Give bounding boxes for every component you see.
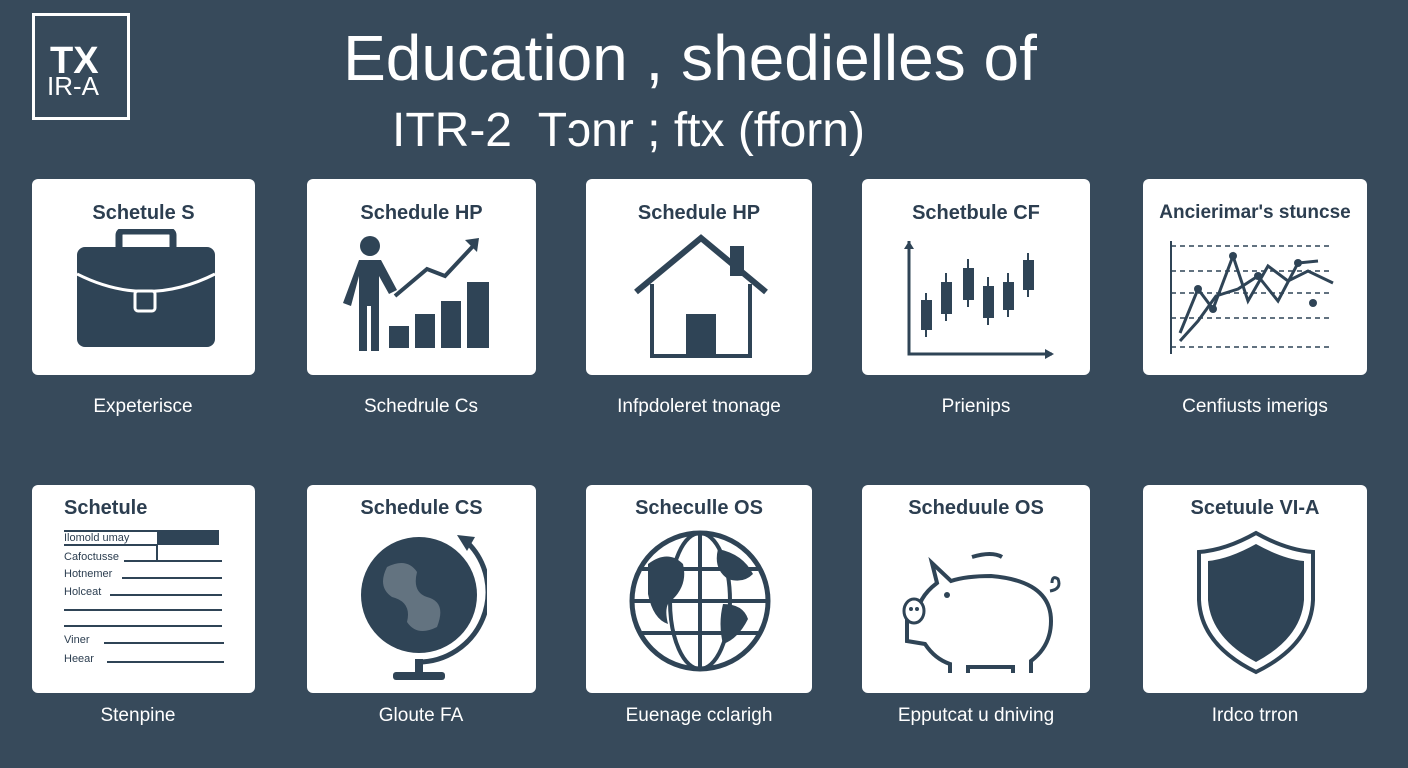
- panel: Ancierimar's stunsce: Ancierimar's stuncse: [1159, 202, 1351, 223]
- panel: Scetulle VI-A: [1143, 485, 1367, 693]
- icon: form: Ilomold umay: [64, 532, 130, 544]
- panel: Scetulle VI-A: Scetuule VI-A: [1191, 497, 1319, 519]
- icon: globe: [630, 530, 770, 672]
- panel: Schedule HP 1: [307, 179, 536, 375]
- panel: Schetule form: [32, 485, 255, 693]
- icon: house: [634, 234, 768, 358]
- panel: Schetule S: Schetule S: [92, 202, 195, 224]
- caption: Prienips: [942, 396, 1010, 417]
- panel: Schedule HP 1: Schedule HP: [360, 202, 483, 224]
- caption: Expeterisce: [93, 396, 193, 417]
- panel: Schedule CS: [307, 485, 536, 693]
- icon: person chart: [343, 236, 489, 351]
- panel: Scheduule OS 2: Scheduule OS: [908, 497, 1044, 519]
- icon: form: Heear: [64, 653, 94, 665]
- panel: Schedule CS: Schedule CS: [360, 497, 483, 519]
- panel: Scheculle OS 1: [586, 485, 812, 693]
- panel: Scheculle OS 1: Scheculle OS: [635, 497, 763, 519]
- panel: Schedule HP 2: [586, 179, 812, 375]
- icon: line chart: [1170, 241, 1334, 354]
- logo: IR-A: [47, 71, 99, 101]
- icon: briefcase: [77, 229, 215, 347]
- icon: globe on stand: [361, 535, 487, 680]
- panel: Ancierimar's stunsce: [1143, 179, 1367, 375]
- caption: Cenfiusts imerigs: [1182, 396, 1328, 417]
- logo: [32, 13, 130, 120]
- panel: Schetbule CF: Schetbule CF: [912, 202, 1040, 224]
- icon: form: Hotnemer: [64, 568, 113, 580]
- icon: form: Viner: [64, 634, 90, 646]
- subtitle: ITR-2 Tɔnr ; ftx (fforn): [392, 104, 865, 157]
- icon: form: [64, 530, 224, 665]
- icon: shield: [1197, 530, 1315, 674]
- caption: Epputcat u dniving: [898, 705, 1054, 726]
- icon: form: Holceat: [64, 586, 101, 598]
- panel: Schedule HP 2: Schedule HP: [638, 202, 760, 224]
- caption: Gloute FA: [379, 705, 463, 726]
- panel: Schetule S: [32, 179, 255, 375]
- panel: Schetule form: Schetule: [64, 497, 147, 519]
- panel: Schetbule CF: [862, 179, 1090, 375]
- icon: piggy bank: [902, 552, 1060, 673]
- caption: Infpdoleret tnonage: [617, 396, 781, 417]
- caption: Irdco trron: [1212, 705, 1298, 726]
- panel: Scheduule OS 2: [862, 485, 1090, 693]
- caption: Schedrule Cs: [364, 396, 478, 417]
- icon: candlestick chart: [904, 241, 1054, 359]
- caption: Stenpine: [100, 705, 176, 726]
- title: Education , shedielles of: [343, 22, 1037, 94]
- caption: Euenage cclarigh: [626, 705, 772, 726]
- logo: TX: [50, 40, 99, 82]
- icon: form: Cafoctusse: [64, 551, 119, 563]
